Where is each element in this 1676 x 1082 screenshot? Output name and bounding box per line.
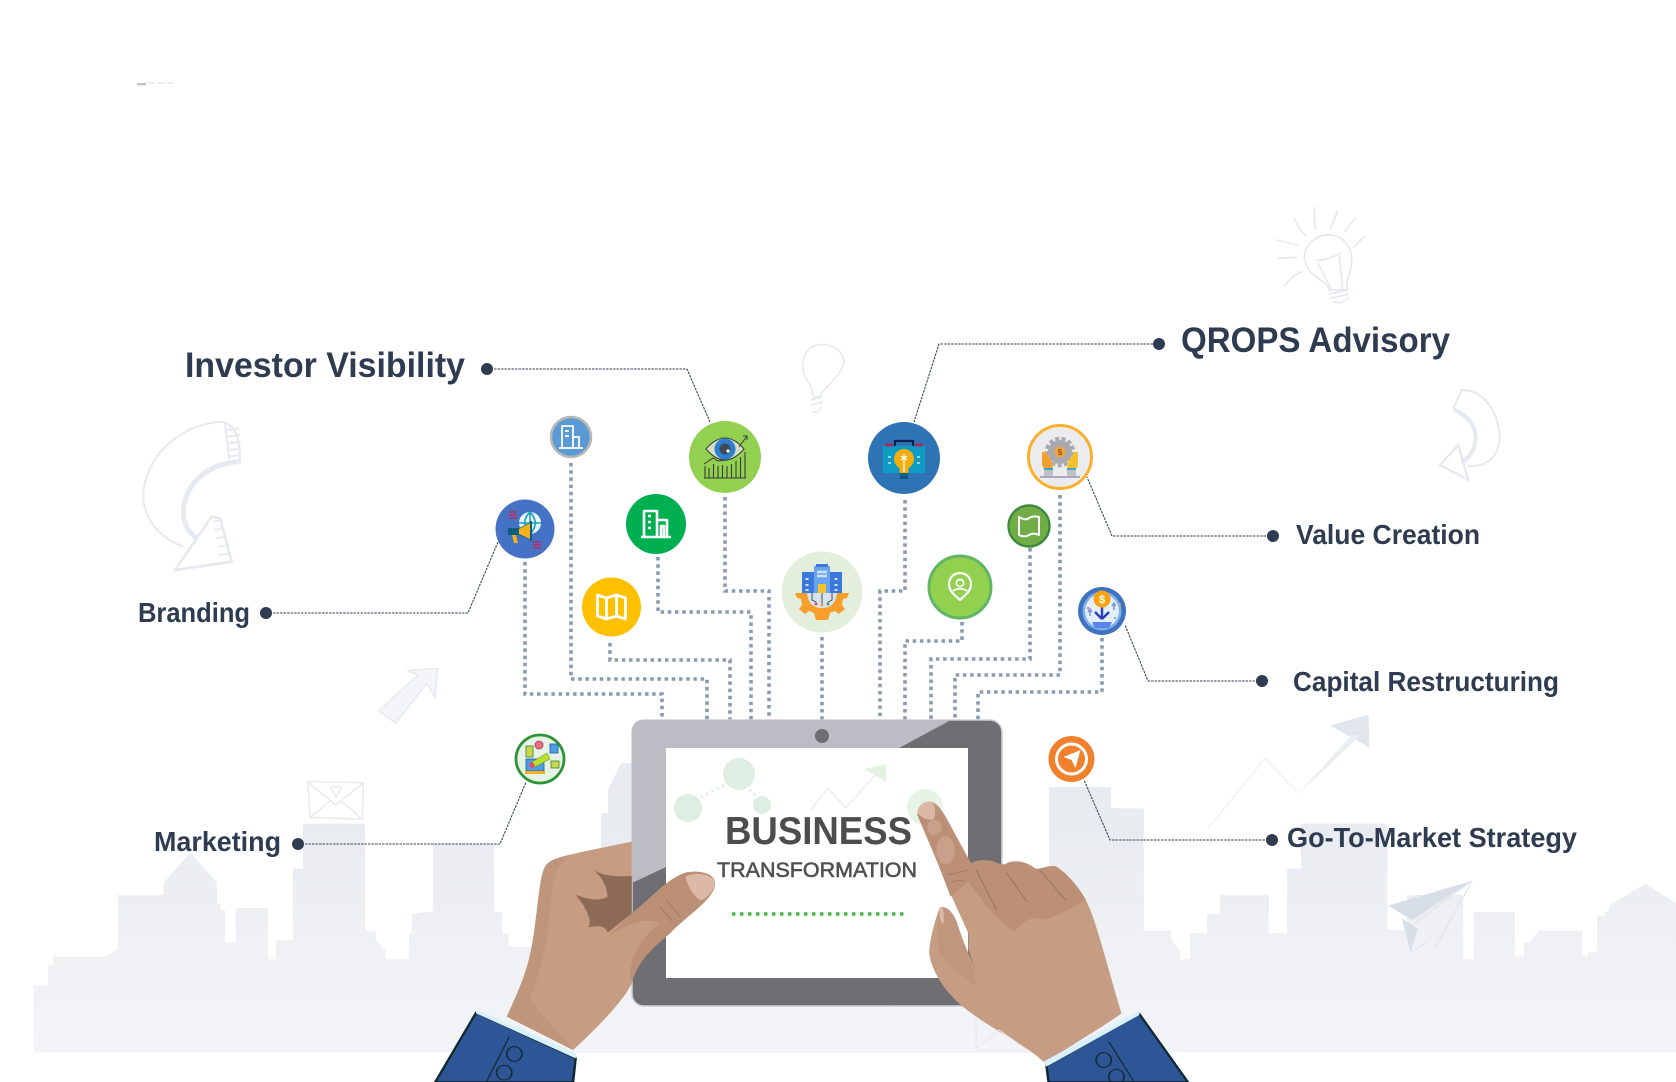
label: Go-To-Market Strategy: Go-To-Market Strategy (1287, 822, 1577, 853)
label: Investor Visibility: Investor Visibility (185, 346, 466, 385)
icon: gear with hands (value creation): $ (1058, 448, 1063, 457)
screen watermark graphics (674, 758, 943, 825)
icon: small green map (1008, 506, 1050, 546)
tablet camera (815, 729, 829, 743)
tiny mark top left (137, 83, 174, 85)
tablet body (632, 720, 1002, 1006)
icon: blue building (551, 417, 591, 457)
left sleeve (435, 1013, 576, 1082)
doodle: small light bulb centre (803, 344, 844, 412)
icon: plant with coin (capital restructuring): $ (1099, 594, 1105, 606)
icon: yellow map (582, 578, 641, 636)
doodle: curved arrow right (1440, 390, 1500, 480)
green dotted divider (732, 912, 904, 916)
icon: marketing (516, 735, 564, 783)
label: Branding: Branding (138, 597, 250, 628)
icon: gear with hands (value creation) (1028, 426, 1092, 488)
dotted connectors to tablet (525, 463, 1102, 720)
icon: green building (626, 494, 686, 554)
label: QROPS Advisory: QROPS Advisory (1181, 321, 1450, 360)
leader lines (266, 344, 1273, 844)
label: Capital Restructuring: Capital Restructuring (1293, 666, 1559, 697)
doodle: light bulb upper right (1277, 207, 1364, 303)
icon: city building on gear (centre) (782, 552, 862, 632)
tablet light bezel (632, 720, 951, 883)
doodle: envelope (308, 782, 363, 819)
doodle: sketched arrow (379, 668, 437, 723)
icon: eye and chart (investor visibility) (689, 421, 761, 493)
tablet screen (666, 748, 968, 978)
doodle: faint envelope under tablet (976, 1017, 1027, 1050)
left hand shading (507, 854, 715, 1050)
right hand with sleeve (917, 802, 1188, 1082)
icon: plant with coin (capital restructuring) (1078, 587, 1126, 635)
doodle: rising arrow (1208, 714, 1370, 828)
right hand (917, 802, 1122, 1063)
icon: megaphone and globe (branding) (496, 500, 554, 558)
right hand shading (917, 802, 1086, 987)
icon: navigation compass (go-to-market) (1048, 736, 1094, 782)
label: Value Creation: Value Creation (1296, 519, 1480, 550)
heading BUSINESS: BUSINESS (725, 810, 912, 853)
icon: location pin (929, 556, 991, 618)
doodle: large curved arrow left (143, 422, 240, 570)
city skyline background (34, 763, 1676, 1053)
icon: briefcase and bulb (QROPS advisory) (868, 422, 940, 494)
left hand (507, 842, 715, 1050)
right sleeve (1047, 1014, 1188, 1082)
sub heading TRANSFORMATION: TRANSFORMATION (717, 858, 917, 882)
doodle: paper plane (1388, 881, 1472, 952)
label: Marketing: Marketing (154, 826, 281, 857)
tablet (632, 720, 1002, 1006)
left hand with sleeve (435, 842, 715, 1082)
